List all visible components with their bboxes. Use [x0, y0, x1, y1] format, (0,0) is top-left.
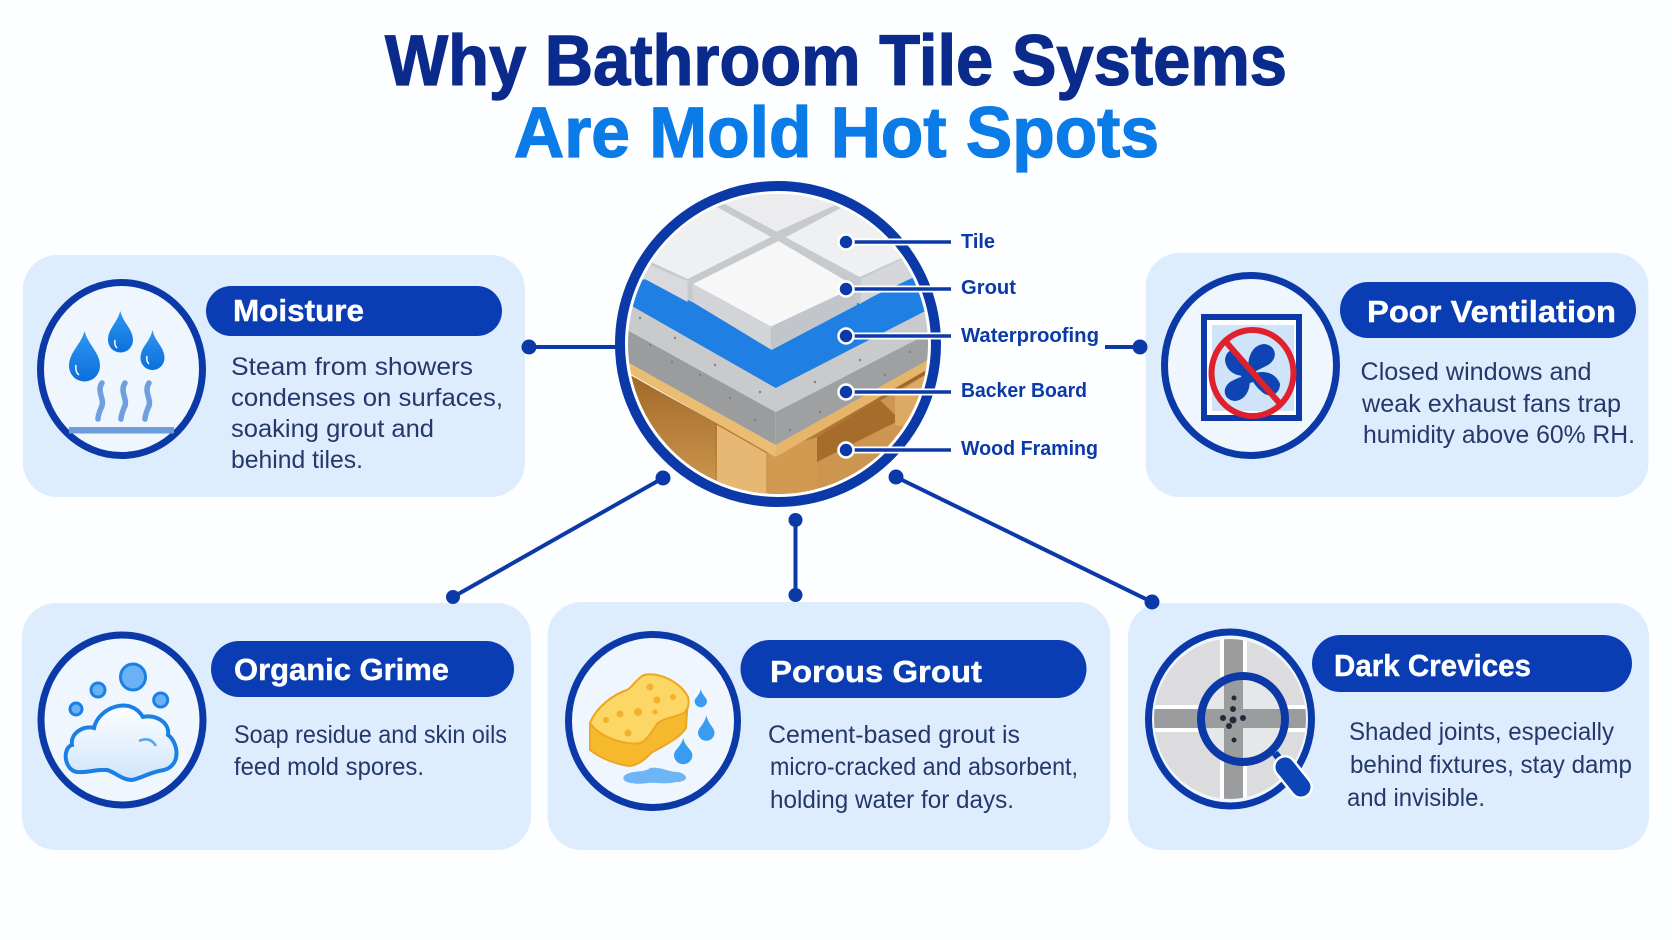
body text: feed mold spores.: [234, 753, 424, 781]
body text: Soap residue and skin oils: [234, 721, 507, 749]
label: waterproofing: [838, 325, 1099, 347]
label: tile: [838, 231, 995, 253]
heading pill: Poor Ventilation: [1367, 294, 1616, 329]
body text: and invisible.: [1347, 784, 1485, 812]
title: Are Mold Hot Spots: [514, 94, 1159, 173]
connector: organic grime: [446, 470, 670, 604]
connector: moisture: [522, 340, 618, 354]
body text: behind tiles.: [231, 446, 363, 474]
panel: organic grime: [22, 603, 531, 850]
body text: condenses on surfaces,: [231, 384, 503, 412]
connector: poor ventilation: [1105, 340, 1148, 354]
panel: porous grout: [548, 602, 1110, 850]
heading pill: Organic Grime: [234, 652, 449, 687]
backer board: [620, 300, 935, 445]
heading pill: Porous Grout: [770, 654, 982, 689]
label: grout: [838, 277, 1016, 299]
body text: micro-cracked and absorbent,: [770, 753, 1078, 781]
wood framing: [629, 360, 928, 494]
panel: poor ventilation: [1146, 253, 1648, 497]
body text: [234, 721, 507, 781]
body text: [768, 721, 1078, 814]
label: backer board: Backer Board: [961, 380, 1087, 402]
label: wood framing: [838, 438, 1098, 460]
callouts: layer labels: [838, 231, 1099, 460]
connector: porous grout: [788, 513, 802, 602]
label: waterproofing: Waterproofing: [961, 325, 1099, 347]
heading pill: Dark Crevices: [1334, 648, 1531, 683]
panel: tile system cross-section: [620, 185, 940, 510]
heading pill: [1312, 635, 1632, 692]
body text: soaking grout and: [231, 415, 434, 443]
label: wood framing: Wood Framing: [961, 438, 1098, 460]
waterproofing membrane: [625, 270, 935, 388]
body text: holding water for days.: [770, 786, 1014, 814]
icon: water drops and steam: [69, 311, 174, 434]
connector: dark crevices: [888, 470, 1160, 610]
body text: [1347, 718, 1632, 812]
heading pill: Moisture: [233, 293, 364, 328]
body text: behind fixtures, stay damp: [1350, 751, 1632, 779]
label: backer board: [838, 380, 1087, 402]
title: Why Bathroom Tile Systems: [385, 22, 1287, 101]
panel: moisture: [23, 255, 525, 497]
body text: [1360, 358, 1635, 449]
body text: Steam from showers: [231, 353, 473, 381]
label: grout: Grout: [961, 277, 1016, 299]
body text: Shaded joints, especially: [1349, 718, 1614, 746]
body text: [231, 353, 503, 474]
panel: dark crevices: [1128, 603, 1649, 850]
heading pill: [211, 641, 514, 697]
body text: Closed windows and: [1360, 358, 1592, 386]
icon: blocked fan: [1204, 317, 1299, 418]
label: tile: Tile: [961, 231, 995, 253]
body text: Cement-based grout is: [768, 721, 1020, 749]
heading pill: [1340, 282, 1636, 338]
icon: soap bubbles and foam: [66, 664, 176, 780]
body text: weak exhaust fans trap: [1361, 390, 1621, 418]
icon: wet sponge: [590, 674, 715, 784]
heading pill: [740, 640, 1086, 698]
heading pill: [206, 286, 502, 336]
tiles: [643, 194, 912, 350]
icon: magnified crevice: [1150, 635, 1310, 805]
body text: humidity above 60% RH.: [1363, 421, 1635, 449]
title: [385, 22, 1287, 173]
